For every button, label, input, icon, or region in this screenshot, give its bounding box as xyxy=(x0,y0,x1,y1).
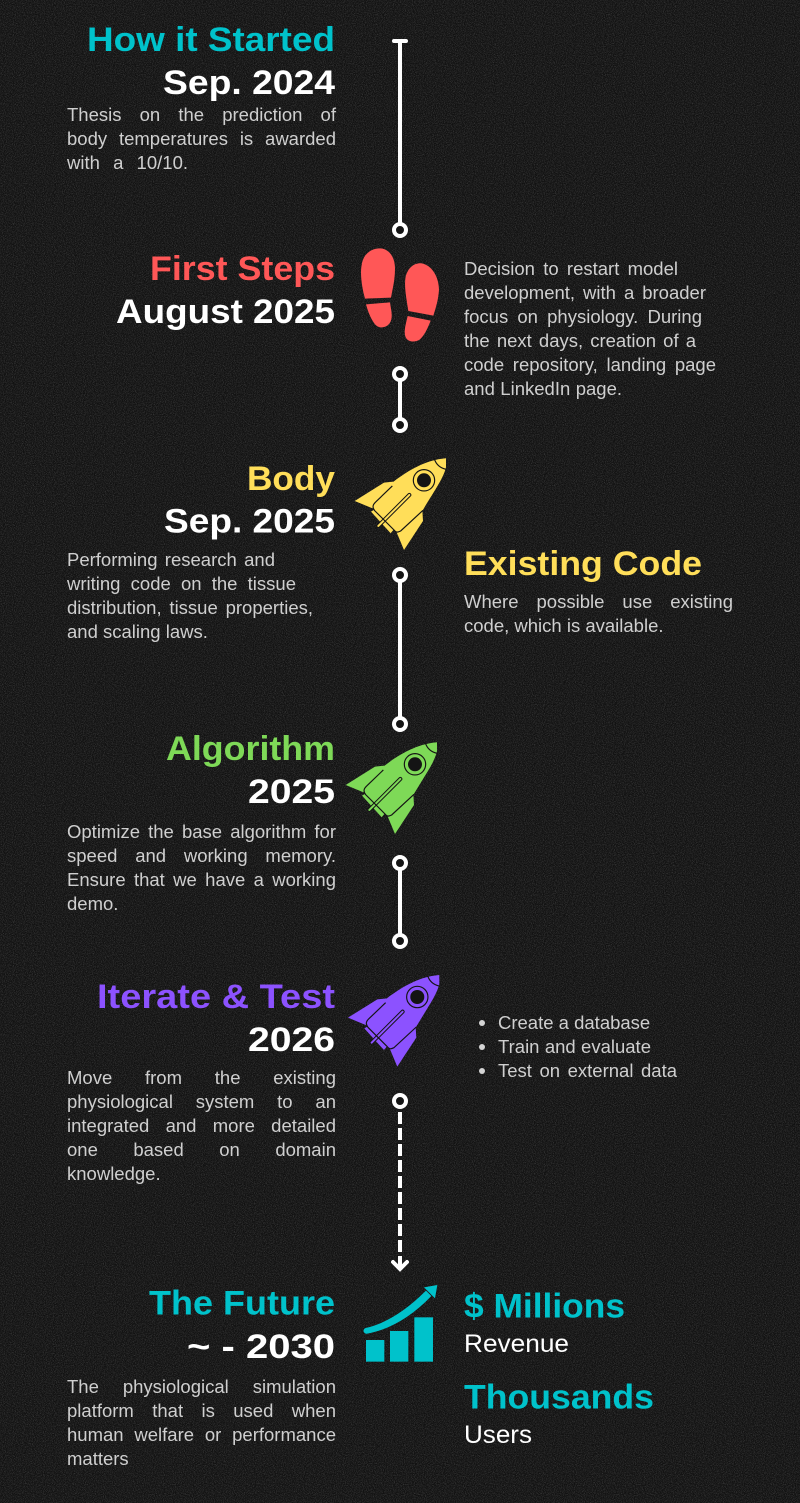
timeline segment: start xyxy=(394,41,406,236)
list: next steps: Create a database xyxy=(498,1012,650,1033)
panel: the future: The Future xyxy=(149,1284,335,1322)
panel: existing code: Existing Code xyxy=(464,545,702,583)
timeline segment: algorithm xyxy=(394,857,406,947)
panel: iterate and test: 2026 xyxy=(248,1021,335,1059)
text: first steps description: Decision to restart model xyxy=(464,258,678,279)
panel: future metrics xyxy=(464,1288,654,1449)
panel: existing code: code, which is available. xyxy=(464,615,664,636)
panel: future metrics: $ Millions xyxy=(464,1288,625,1326)
panel: body: Sep. 2025 xyxy=(164,502,335,540)
panel: iterate and test: Move from the existing xyxy=(67,1067,336,1088)
panel: algorithm: speed and working memory. xyxy=(67,845,336,866)
heading: first steps: August 2025 xyxy=(116,293,335,331)
list: next steps: Test on external data xyxy=(498,1060,677,1081)
list: next steps xyxy=(479,1012,678,1081)
heading: first steps: First Steps xyxy=(150,250,335,288)
panel: how it started: Sep. 2024 xyxy=(163,64,335,102)
panel: the future xyxy=(67,1284,336,1469)
panel: how it started xyxy=(67,21,336,173)
panel: algorithm: Ensure that we have a working xyxy=(67,869,336,890)
panel: body: writing code on the tissue xyxy=(67,573,296,594)
timeline segment: first steps xyxy=(394,368,406,431)
panel: the future: human welfare or performance xyxy=(67,1424,336,1445)
heading: first steps xyxy=(116,250,335,331)
panel: future metrics: Thousands xyxy=(464,1378,654,1416)
panel: iterate and test: integrated and more detailed xyxy=(67,1115,336,1136)
text: first steps description xyxy=(464,258,716,399)
panel: future metrics: Users xyxy=(464,1421,532,1449)
list: next steps: Train and evaluate xyxy=(498,1036,651,1057)
panel: iterate and test: physiological system to an xyxy=(67,1091,336,1112)
text: first steps description: focus on physiology. During xyxy=(464,306,702,327)
panel: algorithm xyxy=(67,730,336,914)
panel: future metrics: Revenue xyxy=(464,1330,569,1358)
icon: yellow rocket xyxy=(355,458,446,550)
panel: iterate and test: one based on domain xyxy=(67,1139,336,1160)
text: first steps description: and LinkedIn page. xyxy=(464,378,622,399)
panel: iterate and test xyxy=(67,978,336,1184)
panel: algorithm: 2025 xyxy=(248,773,335,811)
panel: how it started: with a 10/10. xyxy=(67,152,188,173)
panel: existing code xyxy=(464,545,733,636)
text: first steps description: development, with a broader xyxy=(464,282,706,303)
panel: body: distribution, tissue properties, xyxy=(67,597,313,618)
icon: green rocket xyxy=(346,742,437,834)
panel: the future: The physiological simulation xyxy=(67,1376,336,1397)
panel: body xyxy=(67,460,335,642)
panel: the future: ~ - 2030 xyxy=(187,1328,335,1366)
timeline segment: body xyxy=(394,569,406,730)
panel: how it started: How it Started xyxy=(87,21,335,59)
icon: footprints xyxy=(361,248,439,342)
panel: how it started: Thesis on the prediction of xyxy=(67,104,336,125)
text: first steps description: the next days, creation of a xyxy=(464,330,696,351)
panel: how it started: body temperatures is awarded xyxy=(67,128,336,149)
panel: iterate and test: knowledge. xyxy=(67,1163,161,1184)
text: first steps description: code repository, landing page xyxy=(464,354,716,375)
icon: purple rocket xyxy=(348,975,439,1067)
panel: the future: platform that is used when xyxy=(67,1400,336,1421)
panel: algorithm: demo. xyxy=(67,893,118,914)
panel: body: Performing research and xyxy=(67,549,275,570)
panel: the future: matters xyxy=(67,1448,129,1469)
icon: growth chart xyxy=(364,1285,437,1362)
panel: iterate and test: Iterate & Test xyxy=(97,978,336,1016)
panel: algorithm: Algorithm xyxy=(166,730,335,768)
panel: body: Body xyxy=(247,460,335,498)
dashed arrow to the future xyxy=(393,1095,407,1269)
panel: existing code: Where possible use existing xyxy=(464,591,733,612)
panel: algorithm: Optimize the base algorithm for xyxy=(67,821,336,842)
panel: body: and scaling laws. xyxy=(67,621,208,642)
